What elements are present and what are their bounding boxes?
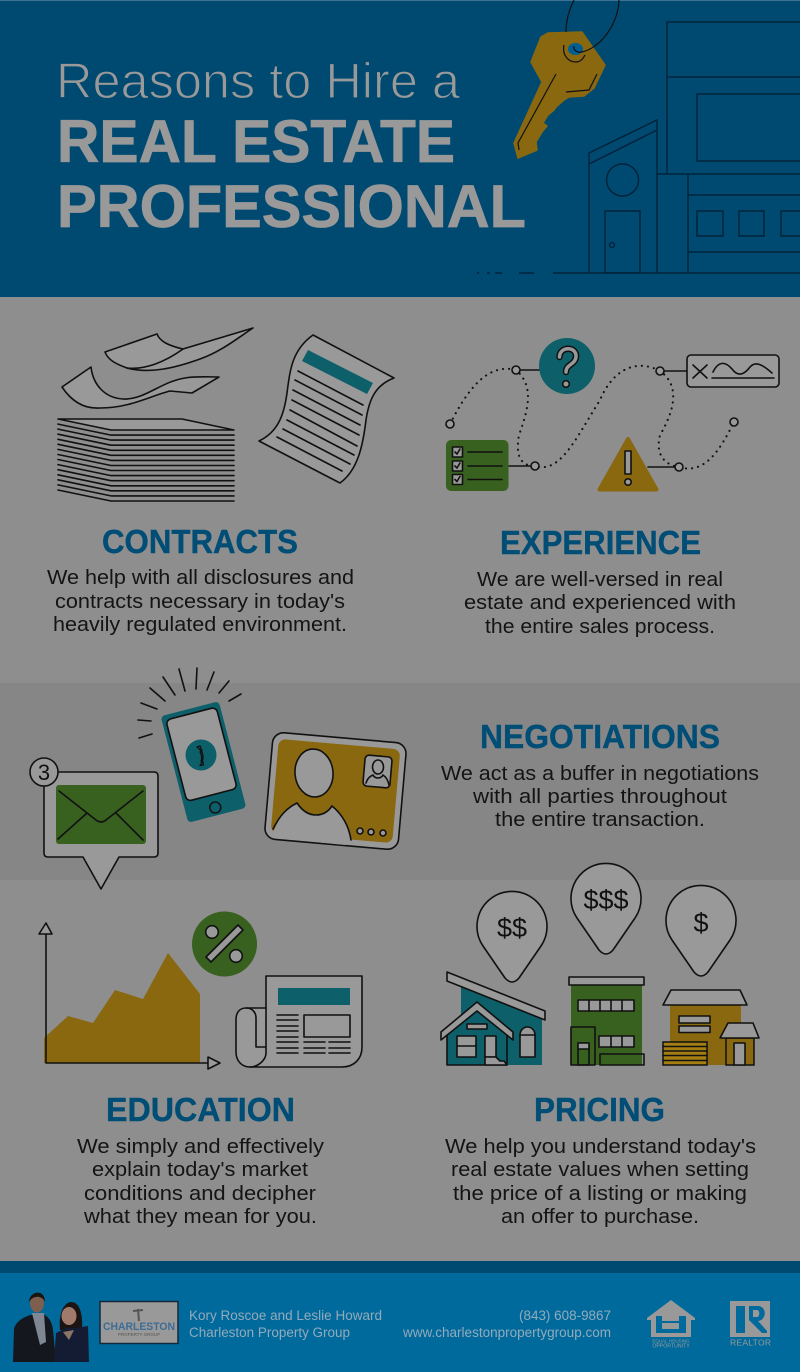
text: contact details: www.charlestonpropertygroup.com xyxy=(402,1325,611,1340)
icon: price pin one dollar: $ xyxy=(693,908,709,938)
text: education: conditions and decipher xyxy=(84,1183,316,1205)
heading: negotiations: NEGOTIATIONS xyxy=(480,718,720,755)
icon: video call tablet xyxy=(264,732,407,850)
text: education xyxy=(77,1136,324,1228)
text: pricing: We help you understand today's xyxy=(445,1136,756,1158)
icon: price pin two dollars xyxy=(477,891,547,982)
icon: question mark xyxy=(539,338,595,394)
icon: message bubble xyxy=(30,758,158,889)
text: contact details: (843) 608-9867 xyxy=(519,1308,611,1323)
icon: price pin two dollars: $$ xyxy=(497,913,527,943)
panel: experience xyxy=(446,338,779,638)
text: experience xyxy=(464,569,736,638)
logo: charleston property group: CHARLESTON xyxy=(103,1321,175,1333)
text: education: what they mean for you. xyxy=(83,1206,317,1228)
panel: header xyxy=(0,0,800,297)
text: contracts: heavily regulated environment. xyxy=(53,614,347,636)
title: REAL ESTATE xyxy=(57,108,455,175)
icon: building outline xyxy=(477,22,800,273)
icon: equal housing opportunity: EQUAL HOUSING xyxy=(652,1338,690,1344)
text: contact details xyxy=(402,1308,611,1340)
icon: equal housing opportunity: OPPORTUNITY xyxy=(652,1344,690,1350)
icon: equal housing opportunity xyxy=(647,1300,695,1350)
text: pricing xyxy=(445,1136,756,1228)
panel: pricing xyxy=(441,863,759,1228)
icon: price pin one dollar xyxy=(666,885,736,976)
panel: negotiations xyxy=(30,668,759,889)
icon: price pin three dollars xyxy=(571,863,641,954)
heading: contracts: CONTRACTS xyxy=(102,523,298,560)
text: negotiations: with all parties throughout xyxy=(472,786,727,808)
icon: percent badge xyxy=(192,912,257,976)
icon: flying papers xyxy=(62,328,253,408)
icon: price pin three dollars: $$$ xyxy=(583,885,629,915)
text: negotiations: We act as a buffer in negotiations xyxy=(441,763,759,785)
icon: teal house xyxy=(441,972,545,1065)
icon: key xyxy=(514,0,619,158)
icon: signature box xyxy=(687,355,779,387)
panel: education xyxy=(39,912,362,1228)
text: agent names: Charleston Property Group xyxy=(189,1325,350,1340)
text: negotiations xyxy=(441,763,759,831)
text: pricing: the price of a listing or making xyxy=(453,1183,747,1205)
heading: experience: EXPERIENCE xyxy=(500,524,701,561)
panel: footer xyxy=(0,1261,800,1372)
icon: checklist xyxy=(446,440,508,491)
icon: realtor logo: REALTOR xyxy=(730,1338,771,1348)
icon: gold house xyxy=(663,990,759,1065)
icon: contract document xyxy=(259,335,394,483)
icon: green building xyxy=(569,977,644,1065)
heading: pricing: PRICING xyxy=(534,1091,665,1128)
icon: dotted path xyxy=(446,366,738,471)
icon: message bubble: 3 xyxy=(38,760,50,785)
icon: warning triangle xyxy=(600,439,656,490)
logo: charleston property group: PROPERTY GROUP xyxy=(118,1332,160,1337)
title xyxy=(56,53,526,240)
text: agent names: Kory Roscoe and Leslie Howard xyxy=(189,1308,382,1323)
text: pricing: real estate values when setting xyxy=(451,1159,749,1181)
text: education: explain today's market xyxy=(92,1159,308,1181)
text: experience: the entire sales process. xyxy=(485,616,715,638)
title: Reasons to Hire a xyxy=(56,53,460,109)
icon: realtor logo xyxy=(730,1301,771,1348)
heading: education: EDUCATION xyxy=(106,1091,295,1128)
chart: market area chart xyxy=(39,923,220,1069)
icon: paper stack xyxy=(58,419,234,501)
text: education: We simply and effectively xyxy=(77,1136,324,1158)
text: experience: We are well-versed in real xyxy=(477,569,723,591)
logo: charleston property group xyxy=(100,1302,178,1344)
text: contracts xyxy=(47,567,354,636)
icon: newspaper xyxy=(236,976,362,1067)
text: agent names xyxy=(189,1308,382,1340)
icon: ringing phone xyxy=(138,668,246,823)
photo: two agents xyxy=(13,1293,89,1362)
panel: contracts xyxy=(47,328,394,636)
text: negotiations: the entire transaction. xyxy=(495,809,705,831)
text: experience: estate and experienced with xyxy=(464,592,736,614)
text: pricing: an offer to purchase. xyxy=(501,1206,699,1228)
title: PROFESSIONAL xyxy=(57,173,526,240)
text: contracts: contracts necessary in today's xyxy=(55,591,345,613)
text: contracts: We help with all disclosures and xyxy=(47,567,354,589)
